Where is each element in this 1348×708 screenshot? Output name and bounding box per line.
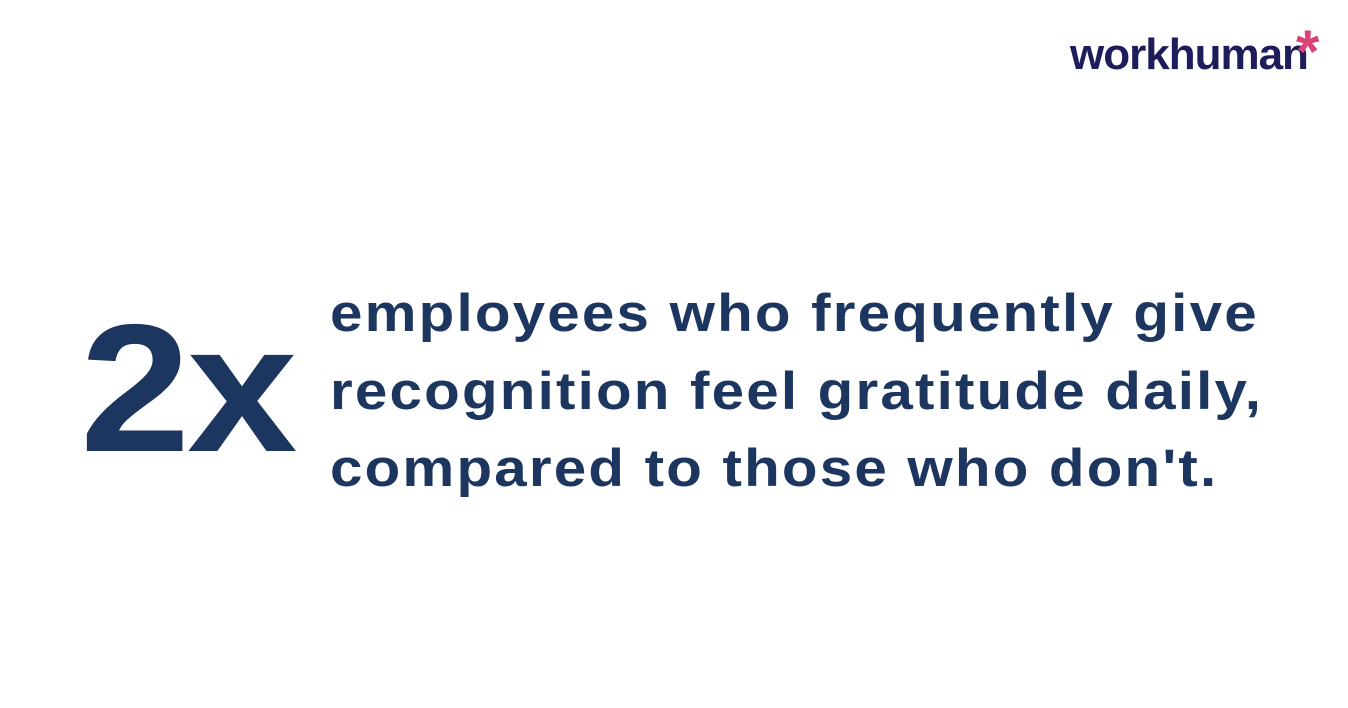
big stat 2x: 2x	[80, 286, 294, 490]
stat description: recognition feel gratitude daily,	[330, 362, 1263, 420]
logo: workhuman: workhuman	[1070, 30, 1308, 79]
logo: workhuman	[1070, 18, 1320, 85]
stat description	[330, 284, 1263, 498]
stat description: employees who frequently give	[330, 284, 1259, 343]
logo: workhuman: *	[1296, 18, 1319, 85]
stat description: compared to those who don't.	[330, 439, 1218, 498]
